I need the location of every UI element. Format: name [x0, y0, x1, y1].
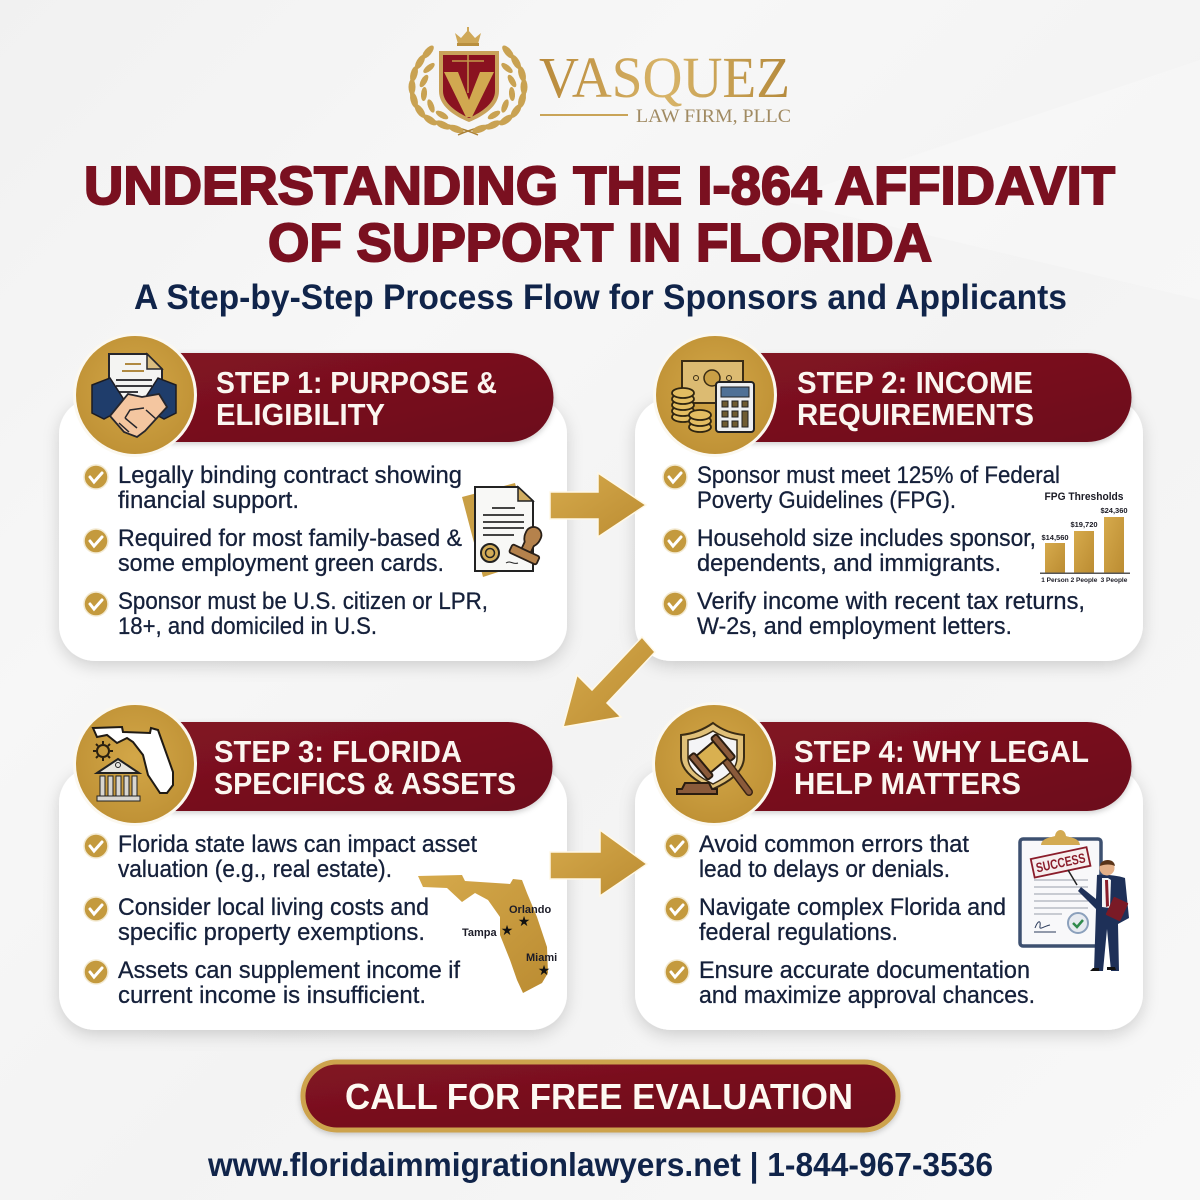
map: Florida cities: Miami	[526, 952, 557, 964]
heading	[797, 365, 1034, 432]
banner	[750, 722, 1132, 811]
heading: STEP 4: WHY LEGAL	[794, 734, 1089, 769]
title: UNDERSTANDING THE I-864 AFFIDAVIT	[84, 156, 1115, 216]
heading: STEP 1: PURPOSE &	[216, 365, 497, 400]
contact line: www.floridaimmigrationlawyers.net | 1-844-967-3536	[207, 1146, 993, 1183]
bullet list: Household size includes sponsor,	[697, 525, 1036, 552]
bullet list: Required for most family-based &	[118, 525, 462, 552]
map: Florida cities	[418, 875, 557, 993]
map: Florida cities: Tampa	[462, 927, 498, 939]
icon: shield	[439, 51, 499, 122]
arrow: step 3 to step 4	[550, 830, 647, 896]
bullet list: Consider local living costs and	[118, 894, 429, 921]
heading: STEP 2: INCOME	[797, 365, 1033, 400]
bullet list: Legally binding contract showing	[118, 462, 462, 489]
bullet list: Assets can supplement income if	[118, 957, 460, 984]
bullet list: lead to delays or denials.	[699, 856, 950, 883]
bullet list	[665, 831, 1035, 1009]
subtitle: A Step-by-Step Process Flow for Sponsors and Applicants	[134, 278, 1067, 317]
heading: STEP 3: FLORIDA	[214, 734, 462, 769]
icon: contract and handshake	[73, 333, 197, 457]
bullet list: valuation (e.g., real estate).	[118, 856, 392, 883]
bar chart: FPG thresholds: 1 Person	[1041, 577, 1069, 584]
bullet list: current income is insufficient.	[118, 982, 426, 1009]
bullet list: Avoid common errors that	[699, 831, 969, 858]
bar chart: FPG thresholds: 3 People	[1101, 577, 1128, 584]
map: Florida cities: Orlando	[509, 904, 551, 916]
bullet list: Florida state laws can impact asset	[118, 831, 477, 858]
card background	[59, 767, 567, 1030]
heading: SPECIFICS & ASSETS	[214, 766, 516, 801]
icon: left laurel	[408, 44, 478, 135]
title	[84, 156, 1115, 273]
bullet list: 18+, and domiciled in U.S.	[118, 613, 377, 640]
panel: step 3 Florida specifics and assets	[59, 702, 567, 1030]
bar chart: FPG thresholds: $14,560	[1041, 533, 1069, 542]
bar chart: FPG thresholds: 2 People	[1071, 577, 1098, 584]
banner	[170, 722, 552, 811]
icon: crown	[455, 27, 481, 46]
bullet list: Sponsor must be U.S. citizen or LPR,	[118, 588, 488, 615]
bullet list: dependents, and immigrants.	[697, 550, 1001, 577]
icon: Florida and courthouse	[73, 702, 197, 826]
card background	[635, 767, 1143, 1030]
map: Florida cities: ★	[501, 922, 513, 938]
bullet list: Sponsor must meet 125% of Federal	[697, 462, 1060, 489]
icon: gavel and shield	[652, 702, 776, 826]
banner	[170, 353, 554, 442]
icon: money, coins and calculator	[653, 333, 777, 457]
heading	[794, 734, 1089, 801]
bullet list: federal regulations.	[699, 919, 898, 946]
arrow: step 2 to step 3	[563, 637, 655, 727]
bullet list: Verify income with recent tax returns,	[697, 588, 1085, 615]
icon: right laurel	[458, 44, 528, 135]
card background	[635, 398, 1143, 661]
heading: REQUIREMENTS	[797, 397, 1034, 432]
bullet list: some employment green cards.	[118, 550, 444, 577]
illustration: success clipboard and lawyer: SUCCESS	[1035, 850, 1087, 875]
bullet list	[84, 831, 477, 1009]
logo name: VASQUEZ	[539, 45, 790, 110]
bullet list: and maximize approval chances.	[699, 982, 1035, 1009]
bullet list: Navigate complex Florida and	[699, 894, 1006, 921]
heading: ELIGIBILITY	[216, 397, 385, 432]
banner	[750, 353, 1132, 442]
bar chart: FPG thresholds: FPG Thresholds	[1044, 491, 1124, 503]
heading	[216, 365, 497, 432]
bar chart: FPG thresholds: $19,720	[1070, 520, 1098, 529]
logo subtitle: LAW FIRM, PLLC	[636, 106, 791, 127]
heading	[214, 734, 516, 801]
map: Florida cities: ★	[518, 913, 530, 929]
bullet list	[663, 462, 1085, 640]
call to action button: CALL FOR FREE EVALUATION	[345, 1076, 853, 1117]
bullet list: financial support.	[118, 487, 299, 514]
heading: HELP MATTERS	[794, 766, 1021, 801]
call to action button	[303, 1062, 898, 1130]
bar chart: FPG thresholds: $24,360	[1100, 506, 1128, 515]
arrow: step 1 to step 2	[550, 473, 646, 537]
bullet list: specific property exemptions.	[118, 919, 425, 946]
card background	[59, 398, 567, 661]
panel: step 2 income requirements	[635, 333, 1143, 661]
map: Florida cities: ★	[538, 962, 550, 978]
bullet list: Ensure accurate documentation	[699, 957, 1030, 984]
title: OF SUPPORT IN FLORIDA	[268, 213, 932, 273]
panel: step 1 purpose and eligibility	[59, 333, 567, 661]
logo: Vasquez Law Firm	[408, 27, 791, 135]
bullet list	[84, 462, 488, 640]
bar chart: FPG thresholds	[1040, 491, 1130, 584]
panel: step 4 why legal help matters	[635, 702, 1143, 1030]
icon: stamped document	[462, 483, 550, 577]
bullet list: Poverty Guidelines (FPG).	[697, 487, 956, 514]
illustration: success clipboard and lawyer	[1020, 830, 1129, 971]
bullet list: W-2s, and employment letters.	[697, 613, 1012, 640]
